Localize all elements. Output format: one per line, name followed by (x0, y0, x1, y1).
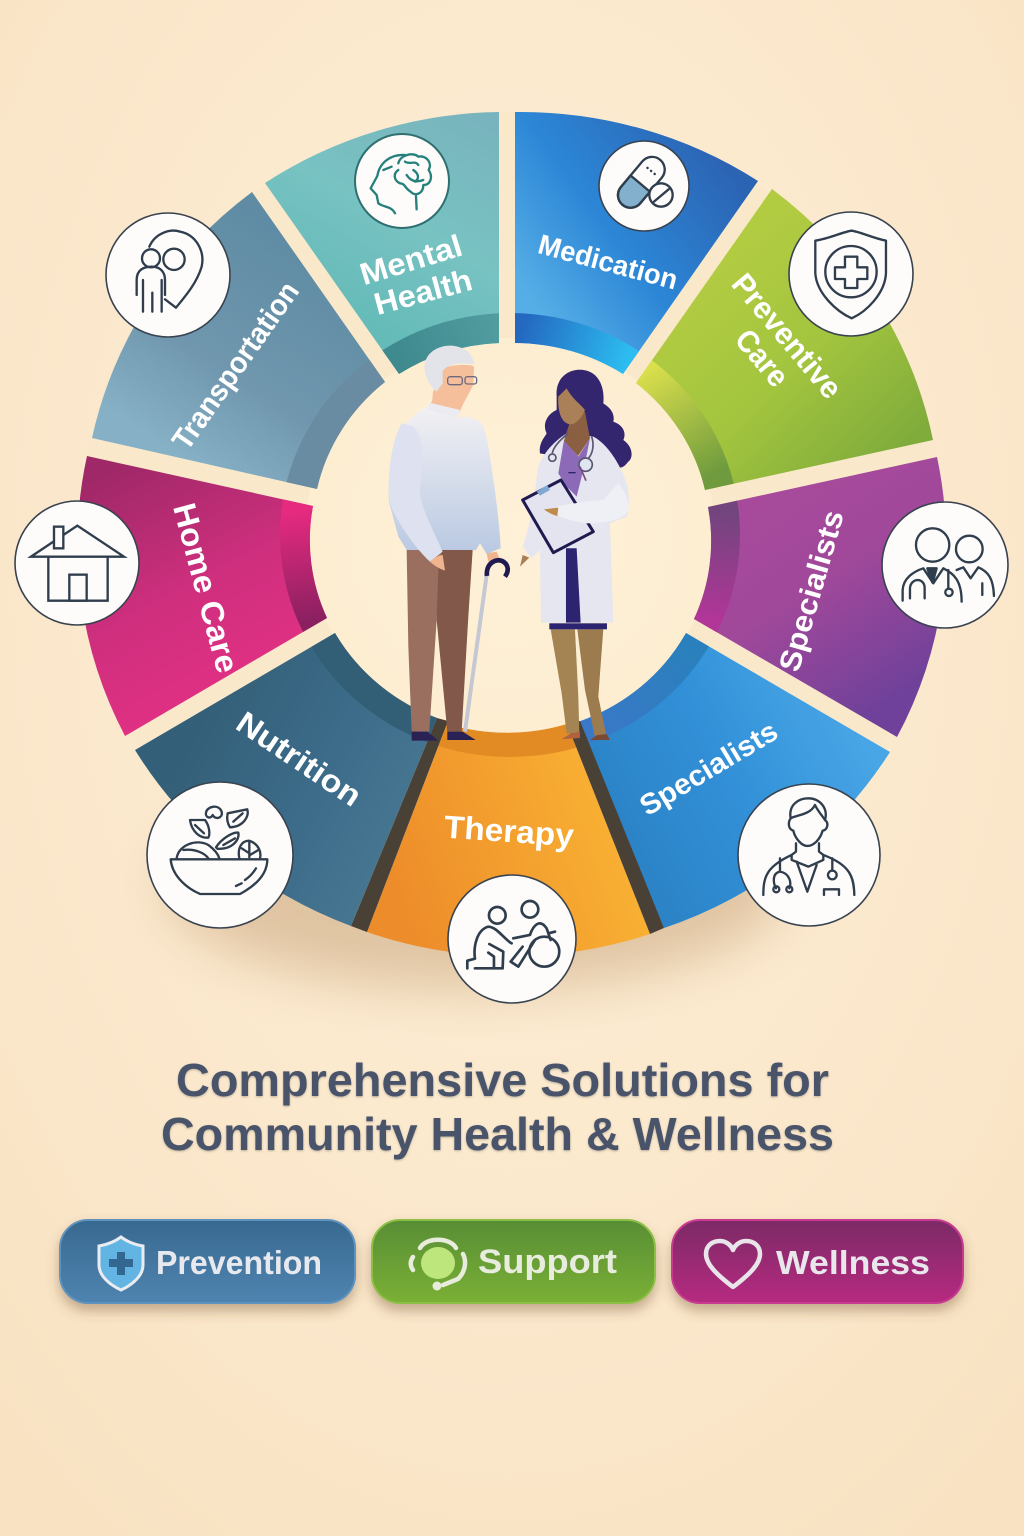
label: Specialists purple: Specialists (773, 507, 851, 675)
title: Comprehensive Solutions for (176, 1054, 829, 1106)
wheel of care segments (77, 112, 946, 956)
label: Medication: Medication (535, 229, 681, 295)
icon: capsule and tablet (599, 141, 689, 231)
segment: specialists purple (694, 457, 946, 737)
title (161, 1054, 834, 1160)
pill: Wellness (672, 1220, 963, 1303)
icon: shield with cross (789, 212, 913, 336)
icon: doctor with stethoscope (738, 784, 880, 926)
icon: salad bowl (147, 782, 293, 928)
segment: preventive care (636, 189, 933, 490)
label: Specialists blue: Specialists (634, 715, 784, 823)
icon: blue shield (99, 1237, 143, 1290)
label: Mental Health (356, 228, 476, 322)
central figures (389, 346, 632, 741)
title: Community Health & Wellness (161, 1108, 834, 1160)
label: Preventive Care: Preventive (725, 267, 849, 405)
figure: female doctor with clipboard (520, 370, 632, 740)
segment: specialists blue (578, 633, 890, 928)
segment: medication (515, 112, 758, 374)
icon: headset (411, 1240, 465, 1290)
icon: person and map pin (106, 213, 230, 337)
icon: heart (706, 1241, 760, 1287)
segment: nutrition (135, 633, 437, 926)
pill: Wellness: Wellness (776, 1244, 930, 1281)
icon: brain in head (355, 134, 449, 228)
segment: transportation (92, 192, 385, 489)
segment: home care (77, 456, 327, 736)
label: Therapy: Therapy (443, 809, 575, 854)
label: Nutrition: Nutrition (230, 705, 368, 813)
icon: house (15, 501, 139, 625)
label: Mental Health: Health (370, 262, 476, 322)
label: Home Care: Home Care (166, 499, 246, 677)
icon: two specialists (882, 502, 1008, 628)
segment: therapy (351, 718, 664, 956)
pill: Prevention: Prevention (156, 1244, 322, 1281)
icon: therapy with wheelchair (448, 875, 576, 1003)
label: Mental Health: Mental (356, 228, 466, 292)
pill: Prevention (60, 1220, 355, 1303)
pill: Support (372, 1220, 655, 1303)
label: Preventive Care: Care (728, 322, 796, 394)
segment: mental health (265, 112, 499, 374)
pill: Support: Support (478, 1243, 617, 1281)
label: Transportation: Transportation (166, 276, 306, 456)
figure: elderly man with cane (389, 346, 508, 741)
